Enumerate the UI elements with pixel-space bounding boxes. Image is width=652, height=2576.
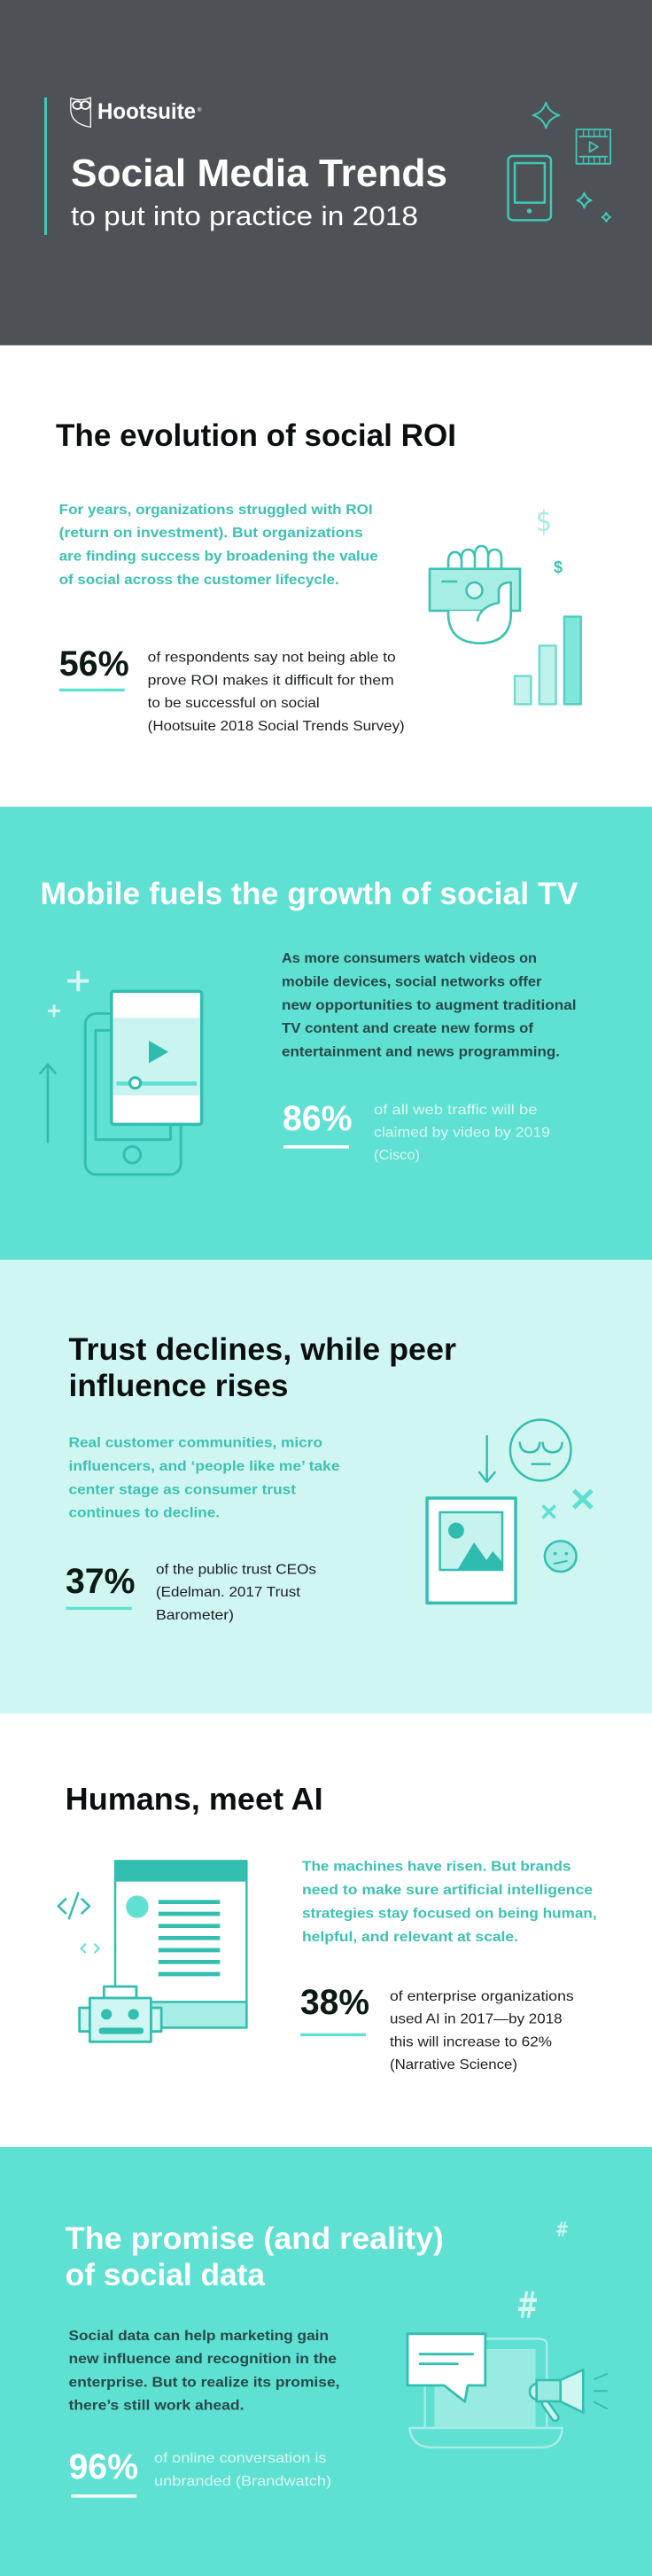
intro text	[302, 1860, 597, 1945]
intro text: influencers, and ‘people like me’ take	[69, 1459, 340, 1474]
heading	[66, 2221, 444, 2292]
icon: hootsuite owl logo	[71, 98, 90, 127]
icon: speech bubble	[408, 2334, 485, 2401]
panel: header	[0, 0, 652, 346]
intro text: As more consumers watch videos on	[282, 951, 537, 966]
stat description: (Edelman. 2017 Trust	[156, 1585, 301, 1600]
intro text: of social across the customer lifecycle.	[59, 573, 339, 588]
panel: social ROI	[0, 346, 652, 807]
panel: AI	[0, 1713, 652, 2147]
intro text	[59, 503, 378, 588]
stat description: of all web traffic will be	[374, 1103, 538, 1118]
stat description	[154, 2451, 331, 2489]
intro text: need to make sure artificial intelligence	[302, 1883, 593, 1898]
intro text: mobile devices, social networks offer	[282, 975, 542, 990]
stat underline	[59, 689, 125, 691]
stat description: (Hootsuite 2018 Social Trends Survey)	[148, 719, 405, 734]
intro text: helpful, and relevant at scale.	[302, 1930, 518, 1945]
heading: The promise (and reality)	[66, 2221, 444, 2256]
intro text: Real customer communities, micro	[69, 1436, 322, 1451]
intro text	[69, 2329, 340, 2414]
icon: small sparkle	[578, 193, 591, 207]
stat description	[148, 651, 405, 734]
heading: The evolution of social ROI	[56, 418, 456, 453]
stat: 56%: 56%	[59, 644, 129, 683]
stat description: of the public trust CEOs	[156, 1563, 316, 1578]
icon: small face	[545, 1541, 577, 1572]
icon: large hash: #	[516, 2283, 539, 2327]
icon: phones with video	[85, 991, 202, 1175]
stat description: (Narrative Science)	[390, 2057, 517, 2073]
icon: megaphone	[530, 2369, 607, 2417]
stat underline	[71, 2494, 136, 2498]
icon: small dollar: $	[554, 558, 563, 576]
icon: document window	[115, 1861, 246, 2027]
icon: down arrow	[479, 1436, 495, 1482]
icon: robot	[80, 1987, 161, 2041]
subtitle: to put into practice in 2018	[71, 200, 418, 231]
heading: influence rises	[69, 1369, 289, 1403]
intro text: The machines have risen. But brands	[302, 1860, 571, 1875]
stat description: prove ROI makes it difficult for them	[148, 673, 394, 688]
panel: social TV	[0, 807, 652, 1260]
heading	[69, 1332, 456, 1403]
intro text: For years, organizations struggled with ROI	[59, 503, 373, 518]
intro text: are finding success by broadening the value	[59, 550, 378, 564]
icon: rising bars	[515, 617, 581, 704]
icon: code brackets	[58, 1893, 99, 1953]
icon: photo frame	[427, 1498, 516, 1603]
stat underline	[283, 1145, 349, 1149]
icon: sleepy face	[510, 1420, 570, 1480]
intro text: continues to decline.	[69, 1506, 220, 1521]
stat description	[390, 1989, 574, 2073]
heading: of social data	[66, 2258, 266, 2292]
icon: film strip	[577, 129, 610, 164]
accent bar	[44, 98, 47, 235]
icon: large sparkle	[533, 103, 559, 128]
stat description: (Cisco)	[374, 1148, 420, 1163]
stat description: of online conversation is	[154, 2451, 326, 2466]
heading: Trust declines, while peer	[69, 1332, 456, 1367]
icon: large dollar: $	[536, 503, 552, 538]
stat description: Barometer)	[156, 1608, 234, 1623]
stat description	[156, 1563, 316, 1623]
icon: up arrow	[41, 1065, 55, 1142]
stat description: used AI in 2017—by 2018	[390, 2012, 563, 2027]
stat description: to be successful on social	[148, 696, 320, 711]
icon: tiny sparkle	[602, 213, 610, 222]
stat description	[374, 1103, 550, 1163]
intro text: new influence and recognition in the	[69, 2352, 337, 2367]
stat: 38%: 38%	[300, 1983, 369, 2022]
intro text: TV content and create new forms of	[282, 1021, 534, 1036]
logo wordmark: Hootsuite	[97, 99, 196, 124]
intro text: there’s still work ahead.	[69, 2399, 244, 2414]
stat: 86%: 86%	[283, 1099, 353, 1138]
panel: trust	[0, 1260, 652, 1713]
intro text: Social data can help marketing gain	[69, 2329, 329, 2344]
intro text: (return on investment). But organizations	[59, 526, 363, 541]
heading: Humans, meet AI	[66, 1783, 323, 1817]
intro text: new opportunities to augment traditional	[282, 998, 576, 1013]
intro text	[282, 951, 576, 1060]
registered mark: ®	[198, 107, 202, 113]
intro text: enterprise. But to realize its promise,	[69, 2376, 340, 2391]
stat description: claimed by video by 2019	[374, 1126, 550, 1141]
stat underline	[300, 2033, 366, 2036]
intro text	[69, 1436, 340, 1521]
stat description: unbranded (Brandwatch)	[154, 2474, 331, 2489]
icon: laptop	[409, 2338, 563, 2447]
stat description: this will increase to 62%	[390, 2035, 552, 2050]
stat description: of respondents say not being able to	[148, 651, 396, 666]
icon: hand holding money	[430, 546, 520, 644]
title: Social Media Trends	[71, 152, 447, 195]
stat underline	[66, 1607, 132, 1610]
stat description: of enterprise organizations	[390, 1989, 574, 2004]
stat: 37%: 37%	[66, 1562, 135, 1601]
intro text: strategies stay focused on being human,	[302, 1906, 597, 1921]
icon: cross marks	[543, 1490, 592, 1518]
icon: small hash: #	[555, 2219, 569, 2242]
intro text: entertainment and news programming.	[282, 1045, 560, 1060]
icon: plus signs	[48, 971, 89, 1017]
icon: tablet	[508, 156, 551, 220]
stat: 96%: 96%	[69, 2447, 138, 2486]
panel: social data	[0, 2147, 652, 2576]
intro text: center stage as consumer trust	[69, 1483, 297, 1498]
heading: Mobile fuels the growth of social TV	[41, 877, 578, 911]
